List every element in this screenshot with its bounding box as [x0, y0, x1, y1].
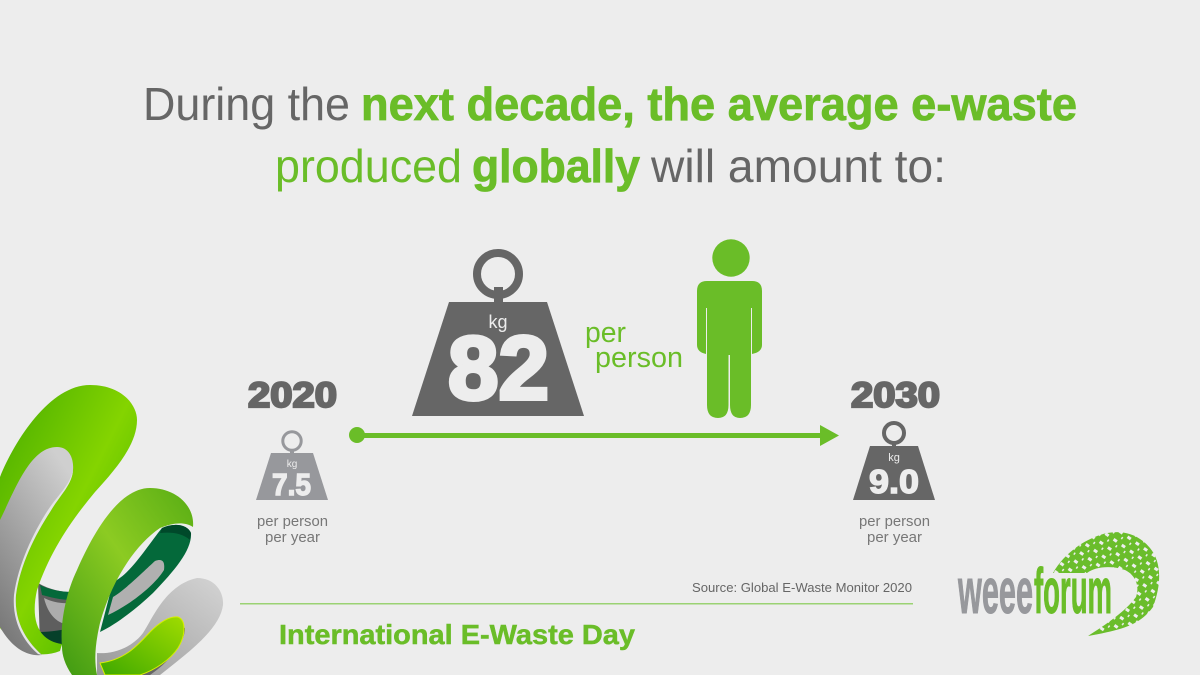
logo swirl — [1053, 532, 1159, 636]
caption 2020 — [257, 514, 328, 546]
title: During the — [143, 78, 350, 130]
per person label: per — [585, 317, 626, 349]
large weight: 82 kg: kg — [488, 312, 508, 332]
timeline arrow — [349, 425, 839, 446]
title: globally — [472, 140, 640, 192]
swirl: middle green arc — [62, 488, 193, 675]
title — [143, 78, 1077, 192]
year 2020: 2020 — [248, 376, 337, 415]
title: will amount to: — [650, 140, 946, 192]
caption 2030: per year — [867, 530, 922, 546]
weight: 9.0 kg: kg — [888, 452, 900, 464]
weight: 7.5 kg — [256, 432, 328, 502]
caption 2020: per person — [257, 514, 328, 530]
weight: 9.0 kg — [853, 423, 935, 500]
swirl: grey lower loop — [97, 578, 223, 675]
caption 2020: per year — [265, 530, 320, 546]
per person label — [585, 317, 683, 374]
logo wordmark: weee — [958, 555, 1033, 627]
weight: 9.0 kg: 9.0 — [869, 463, 919, 500]
swirl graphic — [0, 385, 223, 675]
caption 2030: per person — [859, 514, 930, 530]
year 2030: 2030 — [851, 376, 940, 415]
swirl: right ring interior — [100, 525, 191, 632]
footer label: International E-Waste Day — [279, 619, 635, 650]
swirl: left ring interior — [38, 583, 72, 645]
swirl: large grey loop — [0, 447, 73, 655]
title: produced — [275, 140, 462, 192]
icon: person — [697, 239, 762, 418]
title: next decade, the average e-waste — [361, 78, 1077, 130]
per person label: person — [595, 342, 683, 374]
large weight: 82 kg — [412, 253, 584, 419]
swirl: green inner tail — [100, 617, 185, 675]
2030 column — [851, 376, 940, 546]
source: Source: Global E-Waste Monitor 2020 — [692, 580, 912, 595]
weight: 7.5 kg: 7.5 — [272, 467, 311, 502]
logo: WEEE Forum — [958, 532, 1159, 636]
large weight: 82 kg: 82 — [448, 319, 549, 419]
swirl: large green loop — [0, 385, 137, 654]
weight: 7.5 kg: kg — [287, 459, 297, 470]
caption 2030 — [859, 514, 930, 546]
2020 column — [248, 376, 337, 546]
